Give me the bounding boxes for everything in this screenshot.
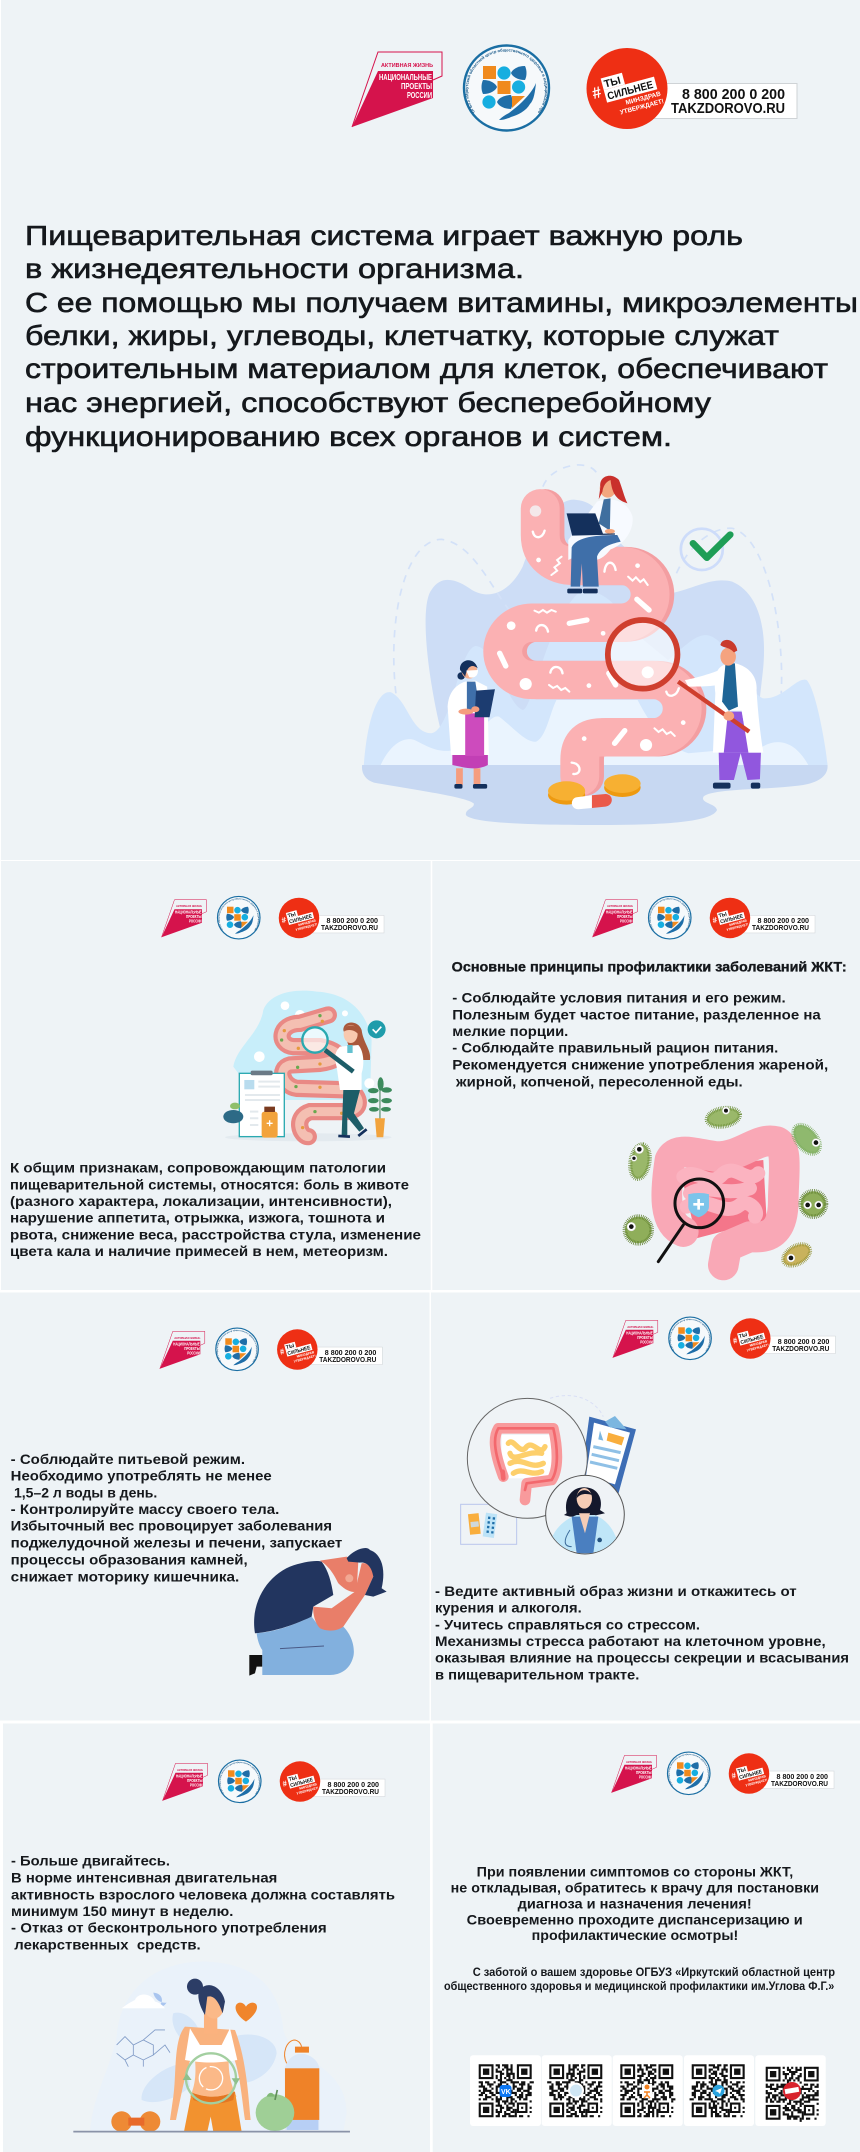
logo strip: МИНЗДРАВ bbox=[296, 1350, 315, 1359]
illustration: man holding head bbox=[249, 1548, 387, 1676]
logo strip: СИЛЬНЕЕ bbox=[739, 1769, 763, 1781]
logo strip: НАЦИОНАЛЬНЫЕ bbox=[173, 1341, 200, 1346]
molecule bbox=[117, 2030, 170, 2067]
logo strip: СИЛЬНЕЕ bbox=[290, 1777, 314, 1789]
magnified intestine bbox=[467, 1398, 587, 1518]
text: principles: - Соблюдайте правильный рацион питания. bbox=[452, 1040, 778, 1056]
floor line bbox=[73, 2129, 350, 2134]
pills box bbox=[461, 1504, 517, 1544]
logo strip: УТВЕРЖДАЕТ! bbox=[726, 922, 749, 932]
text: symptoms: рвота, снижение веса, расстройства стула, изменение bbox=[10, 1226, 421, 1242]
logo strip bbox=[611, 1752, 834, 1796]
plants bbox=[223, 1077, 392, 1137]
text: activity and stress bbox=[435, 1583, 849, 1682]
logo strip: УТВЕРЖДАЕТ! bbox=[745, 1778, 768, 1788]
panel: hero bbox=[1, 0, 860, 860]
logo strip: hero: 8 800 200 0 200 bbox=[682, 86, 785, 103]
text: principles: жирной, копченой, пересоленной еды. bbox=[455, 1074, 743, 1090]
intestine bbox=[500, 505, 687, 777]
panel: common symptoms bbox=[1, 861, 430, 1290]
text: activity and stress: - Учитесь справляться со стрессом. bbox=[435, 1616, 700, 1632]
magnifier bbox=[608, 620, 749, 732]
illustration: healthy woman bbox=[73, 1962, 350, 2132]
text: see a doctor: профилактические осмотры! bbox=[532, 1927, 738, 1943]
logo strip: # bbox=[279, 1347, 286, 1357]
logo strip: ТЫ bbox=[287, 911, 297, 919]
logo strip: НАЦИОНАЛЬНЫЕ bbox=[175, 910, 202, 915]
logo strip: 8 800 200 0 200 bbox=[758, 916, 809, 925]
text: see a doctor: диагноза и назначения лечения! bbox=[518, 1896, 752, 1912]
logo strip: hero: ПРОЕКТЫ bbox=[401, 81, 432, 91]
icon: heart bbox=[236, 2003, 257, 2022]
logo strip: ПРОЕКТЫ bbox=[186, 914, 202, 919]
heading text: Пищеварительная система играет важную роль bbox=[25, 220, 743, 251]
text: symptoms: К общим признакам, сопровождающим патологии bbox=[10, 1160, 386, 1176]
logo strip: СИЛЬНЕЕ bbox=[720, 913, 744, 925]
logo strip: TAKZDOROVO.RU bbox=[772, 1344, 829, 1353]
text: water and weight: снижает моторику кишечника. bbox=[11, 1568, 239, 1584]
logo strip: hero: НАЦИОНАЛЬНЫЕ bbox=[379, 72, 432, 82]
text: activity and stress: оказывая влияние на процессы секреции и всасывания bbox=[435, 1650, 849, 1666]
logo strip: АКТИВНАЯ ЖИЗНЬ bbox=[626, 1760, 652, 1764]
logo strip: РОССИИ bbox=[189, 919, 202, 924]
text: water and weight: - Соблюдайте питьевой режим. bbox=[11, 1451, 245, 1467]
clipboard bbox=[580, 1416, 636, 1494]
heading text: строительным материалом для клеток, обеспечивают bbox=[25, 353, 828, 384]
doctor figure bbox=[302, 1022, 370, 1137]
logo strip: УТВЕРЖДАЕТ! bbox=[293, 1354, 316, 1364]
logo strip: ТЫ bbox=[718, 911, 728, 919]
text: principles bbox=[452, 990, 828, 1090]
text: see a doctor: не откладывая, обратитесь к врачу для постановки bbox=[451, 1880, 819, 1896]
logo strip bbox=[160, 1328, 382, 1372]
text: movement and medication: минимум 150 минут в неделю. bbox=[11, 1903, 233, 1919]
bacteria bbox=[625, 1106, 826, 1270]
heading text: нас энергией, способствуют бесперебойному bbox=[25, 387, 711, 418]
QR code: website bbox=[542, 2055, 612, 2126]
logo strip: 8 800 200 0 200 bbox=[328, 1780, 379, 1789]
logo strip: АКТИВНАЯ ЖИЗНЬ bbox=[627, 1325, 653, 1329]
logo strip: 8 800 200 0 200 bbox=[776, 1772, 828, 1781]
logo strip bbox=[592, 896, 816, 940]
logo strip bbox=[161, 896, 384, 940]
text: symptoms: нарушение аппетита, отрыжка, изжога, тошнота и bbox=[10, 1210, 385, 1226]
QR codes row bbox=[470, 2055, 826, 2126]
logo strip: АКТИВНАЯ ЖИЗНЬ bbox=[174, 1336, 200, 1340]
figure: doctor with clipboard bbox=[448, 660, 495, 789]
text: movement and medication: В норме интенсивная двигательная bbox=[11, 1869, 277, 1885]
logo strip: ОГБУЗ «Иркутский областной центр общественного здоровья и медицинской профилактики им. Ф.Г. Углова» bbox=[670, 1318, 710, 1351]
text: water and weight bbox=[11, 1451, 342, 1584]
panel: call to action bbox=[432, 1724, 860, 2152]
logo strip: # bbox=[281, 915, 288, 925]
logo strip: TAKZDOROVO.RU bbox=[322, 1787, 379, 1796]
figure: doctor with laptop bbox=[567, 476, 633, 593]
logo strip: hero: УТВЕРЖДАЕТ! bbox=[619, 98, 665, 116]
text: symptoms bbox=[10, 1160, 421, 1259]
text: movement and medication: лекарственных средств. bbox=[14, 1936, 201, 1952]
logo strip bbox=[162, 1760, 386, 1804]
text: water and weight: Необходимо употреблять не менее bbox=[11, 1468, 272, 1484]
logo strip: hero: АКТИВНАЯ ЖИЗНЬ bbox=[381, 63, 433, 69]
text: symptoms: пищеварительной системы, относятся: боль в животе bbox=[10, 1176, 409, 1192]
text: principles: мелкие порции. bbox=[452, 1023, 568, 1039]
logo strip: МИНЗДРАВ bbox=[299, 1782, 318, 1791]
text: movement and medication bbox=[11, 1853, 395, 1952]
logo strip: # bbox=[282, 1779, 289, 1789]
text: see a doctor bbox=[451, 1864, 819, 1943]
heading text: в жизнедеятельности организма. bbox=[25, 253, 524, 284]
logo strip: РОССИИ bbox=[640, 1339, 653, 1344]
logo strip: # bbox=[731, 1771, 738, 1781]
logo strip: РОССИИ bbox=[620, 919, 632, 924]
logo strip: ТЫ bbox=[738, 1332, 748, 1340]
text: water and weight: - Контролируйте массу своего тела. bbox=[11, 1501, 279, 1517]
logo strip: УТВЕРЖДАЕТ! bbox=[296, 1786, 319, 1796]
logo strip: СИЛЬНЕЕ bbox=[289, 913, 313, 925]
QR code: takzdorovo bbox=[755, 2055, 826, 2126]
text: activity and stress: курения и алкоголя. bbox=[435, 1600, 582, 1616]
pills bbox=[548, 774, 641, 809]
QR code: VK bbox=[470, 2055, 541, 2126]
text: see a doctor: При появлении симптомов со стороны ЖКТ, bbox=[477, 1864, 793, 1880]
logo strip: # bbox=[732, 1336, 739, 1346]
logo strip: TAKZDOROVO.RU bbox=[321, 923, 378, 932]
text: organization credit bbox=[444, 1965, 835, 1993]
logo strip: 8 800 200 0 200 bbox=[326, 916, 378, 925]
heading text: С ее помощью мы получаем витамины, микроэлементы bbox=[25, 287, 858, 318]
heading: principles: Основные принципы профилактики заболеваний ЖКТ: bbox=[452, 960, 847, 975]
text: principles: Полезным будет частое питание, разделенное на bbox=[452, 1006, 821, 1022]
QR code: VK: VK bbox=[501, 2089, 511, 2096]
logo strip: УТВЕРЖДАЕТ! bbox=[295, 922, 318, 932]
heading text bbox=[25, 220, 858, 452]
logo strip: ПРОЕКТЫ bbox=[184, 1346, 200, 1351]
text: movement and medication: активность взрослого человека должна составлять bbox=[11, 1886, 395, 1902]
logo strip: МИНЗДРАВ bbox=[298, 918, 317, 927]
text: activity and stress: в пищеварительном тракте. bbox=[435, 1666, 639, 1682]
QR code: Telegram bbox=[684, 2055, 754, 2126]
logo strip: TAKZDOROVO.RU bbox=[319, 1355, 376, 1364]
text: principles: - Соблюдайте условия питания и его режим. bbox=[452, 990, 786, 1006]
clipboard and bottle bbox=[239, 1071, 284, 1138]
logo strip: hero bbox=[352, 44, 798, 132]
logo strip: hero: TAKZDOROVO.RU bbox=[671, 100, 785, 117]
illustration: doctor with intestine bbox=[223, 991, 392, 1141]
illustration: doctors examining intestine bbox=[362, 465, 828, 825]
doctor in circle bbox=[546, 1475, 624, 1554]
illustration: intestine, clipboard, doctor bbox=[461, 1396, 636, 1554]
bottle bbox=[285, 2040, 319, 2130]
apple bbox=[256, 2090, 294, 2131]
logo strip: hero: РОССИИ bbox=[407, 90, 432, 100]
icon: check badge bbox=[368, 1020, 386, 1038]
illustration: colon with bacteria bbox=[625, 1106, 826, 1270]
logo strip: АКТИВНАЯ ЖИЗНЬ bbox=[177, 1768, 203, 1772]
logo strip: ПРОЕКТЫ bbox=[187, 1778, 202, 1783]
heading text: функционированию всех органов и систем. bbox=[25, 421, 672, 452]
woman bbox=[170, 1979, 251, 2132]
logo strip: TAKZDOROVO.RU bbox=[771, 1779, 828, 1788]
logo strip: СИЛЬНЕЕ bbox=[287, 1345, 312, 1357]
logo strip: РОССИИ bbox=[190, 1782, 202, 1787]
cloud and moon bbox=[122, 1993, 167, 2008]
logo strip: УТВЕРЖДАЕТ! bbox=[746, 1343, 769, 1353]
logo strip: ОГБУЗ «Иркутский областной центр общественного здоровья и медицинской профилактики им. Ф.Г. Углова» bbox=[668, 1754, 710, 1786]
logo strip: ТЫ bbox=[285, 1343, 295, 1351]
text: principles: Рекомендуется снижение употребления жареной, bbox=[452, 1056, 828, 1072]
text: symptoms: (разного характера, локализации, интенсивности), bbox=[10, 1193, 392, 1209]
logo strip: hero: СИЛЬНЕЕ bbox=[606, 79, 655, 103]
logo strip: ТЫ bbox=[288, 1775, 298, 1783]
text: movement and medication: - Отказ от бесконтрольного употребления bbox=[11, 1920, 327, 1936]
logo strip: ПРОЕКТЫ bbox=[636, 1770, 652, 1775]
icon: check mark bbox=[681, 529, 730, 570]
logo strip: 8 800 200 0 200 bbox=[778, 1337, 829, 1346]
logo strip: РОССИИ bbox=[187, 1350, 200, 1355]
text: movement and medication: - Больше двигайтесь. bbox=[11, 1853, 170, 1869]
panel: movement and medication bbox=[3, 1724, 430, 2152]
logo strip: hero: ТЫ bbox=[603, 75, 622, 91]
logo strip: РОССИИ bbox=[639, 1774, 652, 1779]
logo strip: 8 800 200 0 200 bbox=[325, 1348, 376, 1357]
logo strip: СИЛЬНЕЕ bbox=[740, 1334, 765, 1346]
logo strip: hero: МИНЗДРАВ bbox=[625, 91, 662, 107]
text: activity and stress: - Ведите активный образ жизни и откажитесь от bbox=[435, 1583, 797, 1599]
text: water and weight: 1,5–2 л воды в день. bbox=[14, 1484, 157, 1500]
panel: water and weight bbox=[0, 1292, 430, 1720]
text: symptoms: цвета кала и наличие примесей в нем, метеоризм. bbox=[10, 1243, 388, 1259]
panel: prevention principles bbox=[432, 861, 860, 1290]
logo strip: МИНЗДРАВ bbox=[749, 1339, 768, 1348]
logo strip: АКТИВНАЯ ЖИЗНЬ bbox=[607, 904, 633, 908]
logo strip: НАЦИОНАЛЬНЫЕ bbox=[625, 1765, 652, 1770]
logo strip: МИНЗДРАВ bbox=[729, 918, 748, 927]
logo strip: ОГБУЗ «Иркутский областной центр общественного здоровья и медицинской профилактики им. Ф.Г. Углова» bbox=[649, 898, 690, 930]
logo strip: АКТИВНАЯ ЖИЗНЬ bbox=[176, 904, 202, 908]
figure: doctor with magnifier bbox=[685, 640, 763, 789]
panel: activity and stress bbox=[431, 1292, 860, 1720]
heading text: белки, жиры, углеводы, клетчатку, которые служат bbox=[25, 320, 779, 351]
logo strip: hero: # bbox=[590, 84, 603, 103]
logo strip: ПРОЕКТЫ bbox=[617, 914, 632, 919]
text: activity and stress: Механизмы стресса работают на клеточном уровне, bbox=[435, 1633, 826, 1649]
dumbbell bbox=[111, 2111, 160, 2132]
logo strip: ПРОЕКТЫ bbox=[637, 1335, 653, 1340]
logo strip: # bbox=[712, 915, 719, 925]
QR code: OK bbox=[613, 2055, 683, 2126]
text: water and weight: процессы образования камней, bbox=[11, 1552, 248, 1568]
magnifier with shield bbox=[658, 1179, 724, 1262]
logo strip: НАЦИОНАЛЬНЫЕ bbox=[176, 1773, 203, 1778]
text: see a doctor: Своевременно проходите диспансеризацию и bbox=[467, 1912, 803, 1928]
logo strip: TAKZDOROVO.RU bbox=[752, 923, 809, 932]
logo strip: НАЦИОНАЛЬНЫЕ bbox=[606, 910, 633, 915]
logo strip: НАЦИОНАЛЬНЫЕ bbox=[626, 1330, 653, 1335]
text: water and weight: поджелудочной железы и печени, запускает bbox=[11, 1534, 342, 1550]
text: water and weight: Избыточный вес провоцирует заболевания bbox=[11, 1518, 332, 1534]
logo strip: МИНЗДРАВ bbox=[748, 1774, 767, 1783]
logo strip: ТЫ bbox=[737, 1767, 747, 1775]
logo strip bbox=[612, 1316, 836, 1360]
